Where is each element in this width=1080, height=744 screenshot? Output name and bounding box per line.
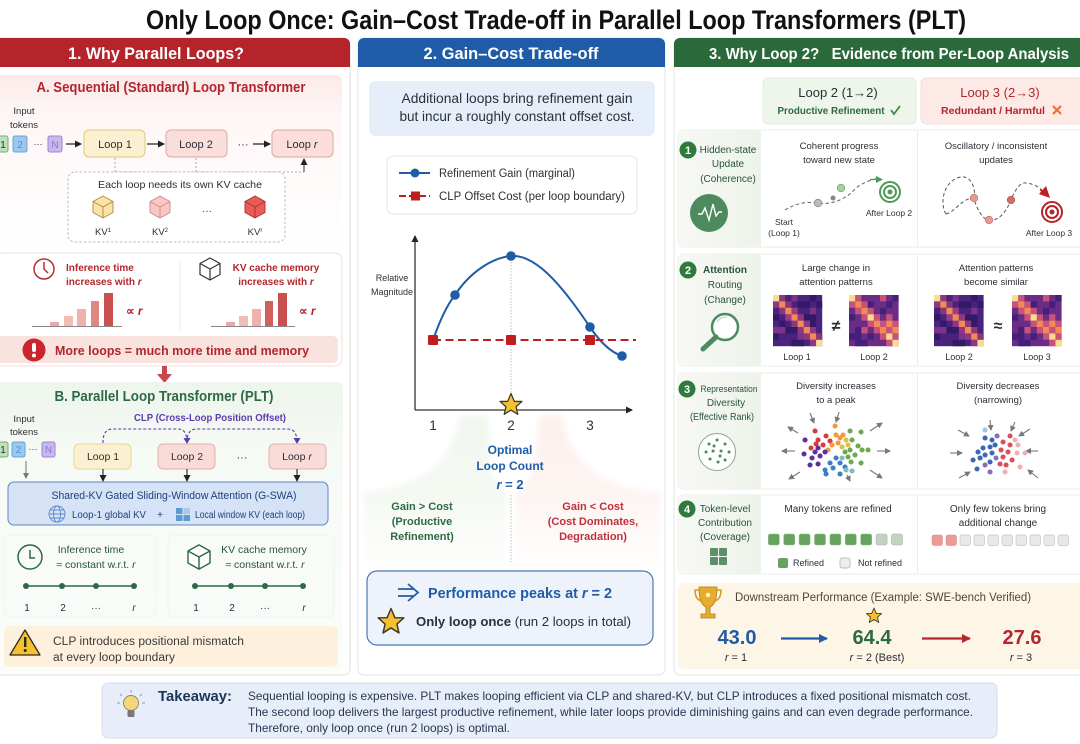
attention heatmaps: loop 2 vs loop 3: Loop 3 (1023, 352, 1051, 362)
attention heatmaps: loop 1 vs loop 2: Large change in (802, 263, 870, 274)
degradation label (548, 501, 638, 543)
token strip: many refined (768, 504, 902, 568)
card: KV memory constant: r (302, 603, 306, 614)
parallel input tokens: 2 (16, 445, 22, 456)
degradation label: (Cost Dominates, (548, 516, 638, 528)
inference time label (66, 263, 143, 288)
scatter: diversity increases (782, 381, 890, 481)
KV memory label: KV cache memory (233, 263, 320, 274)
parallel loops (74, 444, 326, 481)
line chart: gain vs cost: Relative (376, 273, 408, 283)
parallel input tokens: ··· (28, 444, 38, 454)
legend: Refinement Gain (marginal) (439, 168, 575, 180)
degradation label: Degradation) (559, 531, 627, 543)
downstream performance (678, 583, 1080, 669)
section A background and heading: A. Sequential (Standard) Loop Transformer (36, 80, 306, 96)
arrow: r1 to r2 (781, 637, 827, 640)
warning: more loops (0, 336, 338, 363)
oscillatory updates: Oscillatory / inconsistent (945, 141, 1048, 152)
takeaway (102, 683, 997, 738)
takeaway: Sequential looping is expensive. PLT makes looping efficient via CLP and shared-KV, but CLP introduces a fixed positional mismatch cost. (248, 689, 971, 703)
warning: CLP mismatch (4, 626, 338, 667)
row label 4: Token-level (700, 504, 750, 515)
attention heatmaps: loop 1 vs loop 2: Loop 1 (783, 352, 811, 362)
bar chart: inference time (32, 293, 144, 326)
attention heatmaps: loop 2 vs loop 3: Attention patterns (959, 263, 1033, 274)
column head: loop 3 (921, 78, 1080, 124)
glow: degradation region (516, 415, 660, 575)
G-SWA box: Local window KV (each loop) (195, 510, 305, 521)
performance r=2: r = 2 (Best) (850, 652, 904, 664)
icon: window grid (176, 508, 190, 521)
scatter: diversity decreases (950, 381, 1040, 478)
panel: gain-cost trade-off (358, 38, 665, 675)
row label 3 (678, 380, 758, 423)
icon: signal (690, 194, 728, 232)
conclusion box: Performance peaks at r = 2 (428, 586, 612, 602)
performance r=1: r = 1 (725, 652, 747, 664)
column head: loop 3: Loop 3 (2→3) (960, 85, 1040, 100)
G-SWA box: Loop-1 global KV (72, 510, 146, 521)
attention heatmaps: loop 1 vs loop 2: ≠ (832, 318, 841, 335)
icon: trophy (695, 587, 721, 618)
coherent progress: toward new state (803, 155, 875, 166)
card: KV memory constant: 2 (229, 603, 235, 614)
attention heatmaps: loop 1 vs loop 2: Loop 2 (860, 352, 888, 362)
row label 1 (680, 142, 757, 185)
card: KV memory constant (168, 535, 334, 617)
parallel input tokens: Input (13, 414, 35, 425)
productive refinement label: Refinement) (390, 531, 454, 543)
icon: cube dark (200, 258, 220, 280)
attention heatmaps: loop 2 vs loop 3: ≈ (994, 318, 1003, 335)
token strip: many refined: Many tokens are refined (784, 504, 892, 515)
icon: best star (866, 608, 882, 622)
sequential input tokens (0, 106, 62, 152)
scatter: diversity decreases: (narrowing) (974, 395, 1022, 406)
performance r=1 (718, 627, 756, 664)
takeaway: Takeaway: (158, 688, 232, 705)
KV cache box: ··· (202, 206, 212, 217)
KV cache box: KV (95, 227, 108, 238)
token strip: many refined: Refined (793, 558, 824, 568)
card: KV memory constant: 1 (193, 603, 199, 614)
performance r=3: r = 3 (1010, 652, 1032, 664)
token strip: many refined: Not refined (858, 558, 902, 568)
sequential loops chain: ··· (238, 139, 248, 151)
card: inference time constant (4, 535, 156, 617)
downstream performance: Downstream Performance (Example: SWE-bench Verified) (735, 592, 1031, 604)
oscillatory updates: After Loop 3 (1026, 228, 1072, 238)
G-SWA box (8, 482, 328, 525)
performance r=1: 43.0 (718, 627, 756, 649)
card: inference time constant: ··· (91, 603, 101, 614)
line chart: gain vs cost: Magnitude (371, 287, 413, 297)
performance r=2 (850, 627, 904, 664)
scatter: diversity increases: Diversity increases (796, 381, 876, 392)
sequential input tokens: tokens (10, 120, 38, 131)
parallel loops: Loop r (282, 451, 312, 463)
CLP offset connections: CLP (Cross-Loop Position Offset) (134, 412, 286, 424)
attention heatmaps: loop 2 vs loop 3 (934, 263, 1062, 362)
panel header: why loop 2 (674, 38, 1080, 67)
coherent progress (768, 141, 912, 238)
section B background and heading (0, 382, 343, 672)
cost growth panel (0, 253, 342, 366)
attention heatmaps: loop 1 vs loop 2: attention patterns (799, 277, 873, 288)
scatter: diversity increases: to a peak (816, 395, 856, 406)
CLP offset connections (103, 412, 297, 443)
row label 2: 2 (685, 265, 691, 277)
token strip: few refined (932, 504, 1068, 546)
G-SWA box: Shared-KV Gated Sliding-Window Attention (G-SWA) (52, 490, 296, 502)
card: inference time constant: r (132, 603, 136, 614)
section B background and heading: B. Parallel Loop Transformer (PLT) (54, 389, 274, 405)
productive refinement label (390, 501, 454, 543)
oscillatory updates (943, 141, 1072, 238)
sequential loops chain: Loop 1 (98, 139, 132, 151)
optimal loop count label: Optimal (488, 443, 532, 457)
parallel loops: Loop 2 (171, 451, 203, 463)
glow: productive region (364, 415, 506, 575)
row label 4: Contribution (698, 518, 752, 529)
KV cache box: Each loop needs its own KV cache (98, 179, 262, 191)
productive refinement label: Gain > Cost (391, 501, 453, 513)
row label 2: Routing (708, 280, 742, 291)
row label 1: (Coherence) (700, 174, 756, 185)
coherent progress: Start (775, 217, 794, 227)
panel header: trade-off (358, 38, 665, 67)
bar chart: KV memory (211, 293, 317, 326)
line chart: gain vs cost: 1 (429, 418, 437, 433)
row label 4: (Coverage) (700, 532, 750, 543)
attention heatmaps: loop 2 vs loop 3: Loop 2 (945, 352, 973, 362)
row label 3: (Effective Rank) (690, 412, 754, 423)
arrow: r2 to r3 (922, 637, 970, 640)
sequential loops chain: Loop r (286, 139, 319, 151)
KV cache box: r (260, 228, 262, 234)
panel header: why parallel loops: 1. Why Parallel Loops? (68, 45, 244, 63)
takeaway: Therefore, only loop once (run 2 loops) is optimal. (248, 721, 510, 735)
degradation label: Gain < Cost (562, 501, 624, 513)
token strip: few refined: Only few tokens bring (950, 504, 1046, 515)
row 3: representation diversity (678, 373, 1080, 489)
legend: CLP Offset Cost (per loop boundary) (439, 191, 625, 203)
icon: clock red (34, 259, 54, 279)
parallel input tokens (0, 414, 55, 478)
performance r=3 (1003, 627, 1041, 664)
KV memory label: increases with r (238, 277, 315, 288)
row label 3: Representation (700, 384, 758, 394)
card: KV memory constant: ··· (260, 603, 270, 614)
panel header: trade-off: 2. Gain–Cost Trade-off (424, 44, 599, 63)
line chart: gain vs cost: 3 (586, 418, 594, 433)
icon: star (378, 608, 404, 633)
bar chart: inference time: ∝ r (126, 304, 144, 318)
parallel input tokens: N (45, 445, 52, 456)
sequential input tokens: Input (13, 106, 35, 117)
KV cache box: KV (248, 227, 260, 238)
conclusion box (367, 571, 653, 645)
column head: loop 2: Loop 2 (1→2) (798, 85, 878, 100)
warning: CLP mismatch: at every loop boundary (53, 652, 175, 664)
oscillatory updates: updates (979, 155, 1013, 166)
panel header: why parallel loops (0, 38, 350, 67)
KV memory label (233, 263, 320, 288)
parallel loops: Loop 1 (87, 451, 119, 463)
row label 3: 3 (684, 384, 690, 396)
KV cache box: 1 (108, 228, 112, 234)
takeaway: The second loop delivers the largest productive refinement, while later loops provide diminishing gains and can even degrade performance. (248, 705, 973, 719)
warning: more loops: More loops = much more time and memory (55, 344, 309, 358)
card: inference time constant: 2 (60, 603, 66, 614)
section A background and heading (0, 75, 342, 250)
optimal loop count label: r = 2 (496, 477, 524, 492)
card: inference time constant: Inference time (58, 544, 124, 556)
row label 3: Diversity (707, 398, 745, 409)
conclusion box: Only loop once (run 2 loops in total) (416, 615, 631, 629)
card: KV memory constant: KV cache memory (221, 544, 308, 556)
G-SWA box: + (157, 510, 163, 521)
statement box: Additional loops bring refinement gain (402, 90, 632, 106)
statement box (369, 81, 655, 136)
line chart: gain vs cost: 2 (507, 418, 515, 433)
scatter: diversity decreases: Diversity decreases (957, 381, 1040, 392)
coherent progress: Coherent progress (800, 141, 879, 152)
sequential loops chain: Loop 2 (179, 139, 213, 151)
icon: globe (49, 506, 65, 522)
card: KV memory constant: ≈ constant w.r.t. r (225, 559, 305, 571)
row label 2 (680, 262, 747, 306)
sequential input tokens: 1 (0, 140, 6, 151)
column head: loop 2: Productive Refinement (778, 105, 885, 117)
parallel loops: ··· (236, 452, 248, 464)
row label 4 (678, 500, 752, 543)
sequential input tokens: N (51, 140, 59, 151)
parallel input tokens: tokens (10, 427, 38, 438)
row label 2: (Change) (704, 295, 746, 306)
inference time label: Inference time (66, 263, 134, 274)
legend (387, 156, 637, 214)
row 4: token-level contribution (678, 495, 1080, 574)
coherent progress: After Loop 2 (866, 208, 912, 218)
row 2: attention routing (678, 254, 1080, 366)
title: Only Loop Once: Gain–Cost Trade-off in Parallel Loop Transformers (PLT) (146, 5, 966, 35)
attention heatmaps: loop 1 vs loop 2 (773, 263, 899, 362)
performance r=2: 64.4 (853, 627, 892, 649)
statement box: but incur a roughly constant offset cost. (400, 108, 634, 124)
icon: token grid (710, 548, 727, 565)
row label 1: Hidden-state (700, 145, 757, 156)
bar chart: KV memory: ∝ r (299, 304, 317, 318)
icon: optimal star (500, 394, 522, 414)
line chart: gain vs cost (371, 236, 636, 433)
performance r=3: 27.6 (1003, 627, 1041, 649)
card: inference time constant: ≈ constant w.r.t. r (56, 559, 136, 571)
KV cache box (68, 172, 285, 242)
arrow: implies (398, 584, 418, 601)
coherent progress: (Loop 1) (768, 228, 800, 238)
icon: point cloud (698, 434, 736, 470)
card: inference time constant: 1 (24, 603, 30, 614)
productive refinement label: (Productive (392, 516, 452, 528)
row label 1: Update (712, 159, 745, 170)
warning: CLP mismatch: CLP introduces positional mismatch (53, 636, 244, 648)
icon: magnifier (703, 314, 738, 349)
parallel input tokens: 1 (0, 445, 6, 456)
icon: light bulb (117, 690, 145, 717)
row 1: hidden-state update (678, 130, 1080, 247)
KV cache box: 2 (165, 228, 169, 234)
panel: why loop 2 (674, 38, 1080, 675)
KV cache box: KV (152, 227, 165, 238)
inference time label: increases with r (66, 277, 143, 288)
column head: loop 2 (763, 78, 916, 124)
sequential loops chain (66, 130, 333, 172)
row label 4: 4 (684, 504, 691, 516)
optimal loop count label (476, 443, 544, 492)
row label 2: Attention (703, 265, 747, 276)
sequential input tokens: ··· (34, 139, 42, 149)
sequential input tokens: 2 (17, 140, 23, 151)
arrow: from A to B (157, 366, 172, 383)
optimal loop count label: Loop Count (476, 459, 544, 473)
token strip: few refined: additional change (959, 518, 1038, 529)
row label 1: 1 (685, 145, 691, 157)
column head: loop 3: Redundant / Harmful (941, 105, 1045, 117)
attention heatmaps: loop 2 vs loop 3: become similar (964, 277, 1028, 288)
